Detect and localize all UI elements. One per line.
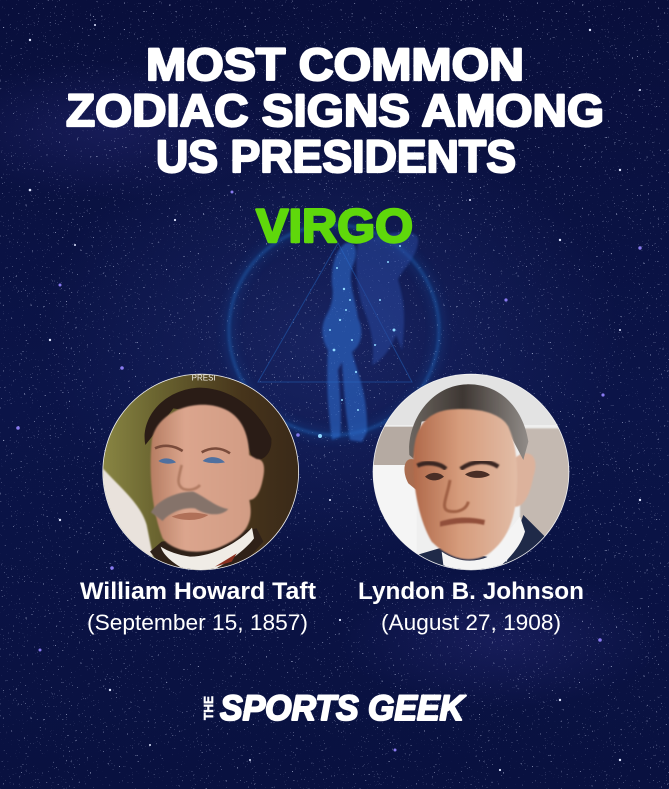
logo: The Sports Geek: SPORTS GEEK xyxy=(220,689,467,728)
president name: Lyndon B. Johnson: Lyndon B. Johnson xyxy=(358,578,584,605)
lip and chin shadow xyxy=(172,513,208,520)
brows xyxy=(417,462,498,469)
hair xyxy=(409,384,528,460)
president name: William Howard Taft: William Howard Taft xyxy=(80,578,316,605)
white drape xyxy=(103,468,154,558)
red tie xyxy=(215,553,237,567)
zodiac sign heading: Virgo: VIRGO xyxy=(256,199,413,252)
virgo figure xyxy=(322,232,418,442)
title: ZODIAC SIGNS AMONG xyxy=(66,85,604,136)
title: US PRESIDENTS xyxy=(156,131,516,182)
title xyxy=(66,39,604,182)
jacket xyxy=(150,528,263,572)
ears xyxy=(404,459,416,490)
logo: The Sports Geek: THE xyxy=(201,696,216,720)
Virgo constellation emblem xyxy=(229,225,439,442)
birth date: Johnson: (August 27, 1908) xyxy=(381,610,561,635)
triangle xyxy=(258,243,412,382)
nose and mouth shadows xyxy=(444,480,468,512)
top caption remnant: PRESI xyxy=(192,374,216,383)
face xyxy=(413,409,517,559)
birth date: Taft: (September 15, 1857) xyxy=(87,610,308,635)
nose shadow xyxy=(178,465,200,490)
shirt collar xyxy=(442,517,525,572)
portrait: Lyndon B. Johnson xyxy=(370,372,573,575)
face xyxy=(151,405,264,552)
glowing ring xyxy=(229,225,439,435)
hair xyxy=(145,388,271,460)
title: MOST COMMON xyxy=(146,39,524,90)
constellation sparkles xyxy=(318,245,401,438)
white collar xyxy=(161,528,254,572)
eyes xyxy=(425,471,490,480)
eyes and brows xyxy=(155,446,230,464)
portrait: William Howard Taft xyxy=(97,372,303,575)
moustache xyxy=(151,492,228,521)
suit xyxy=(418,515,544,570)
